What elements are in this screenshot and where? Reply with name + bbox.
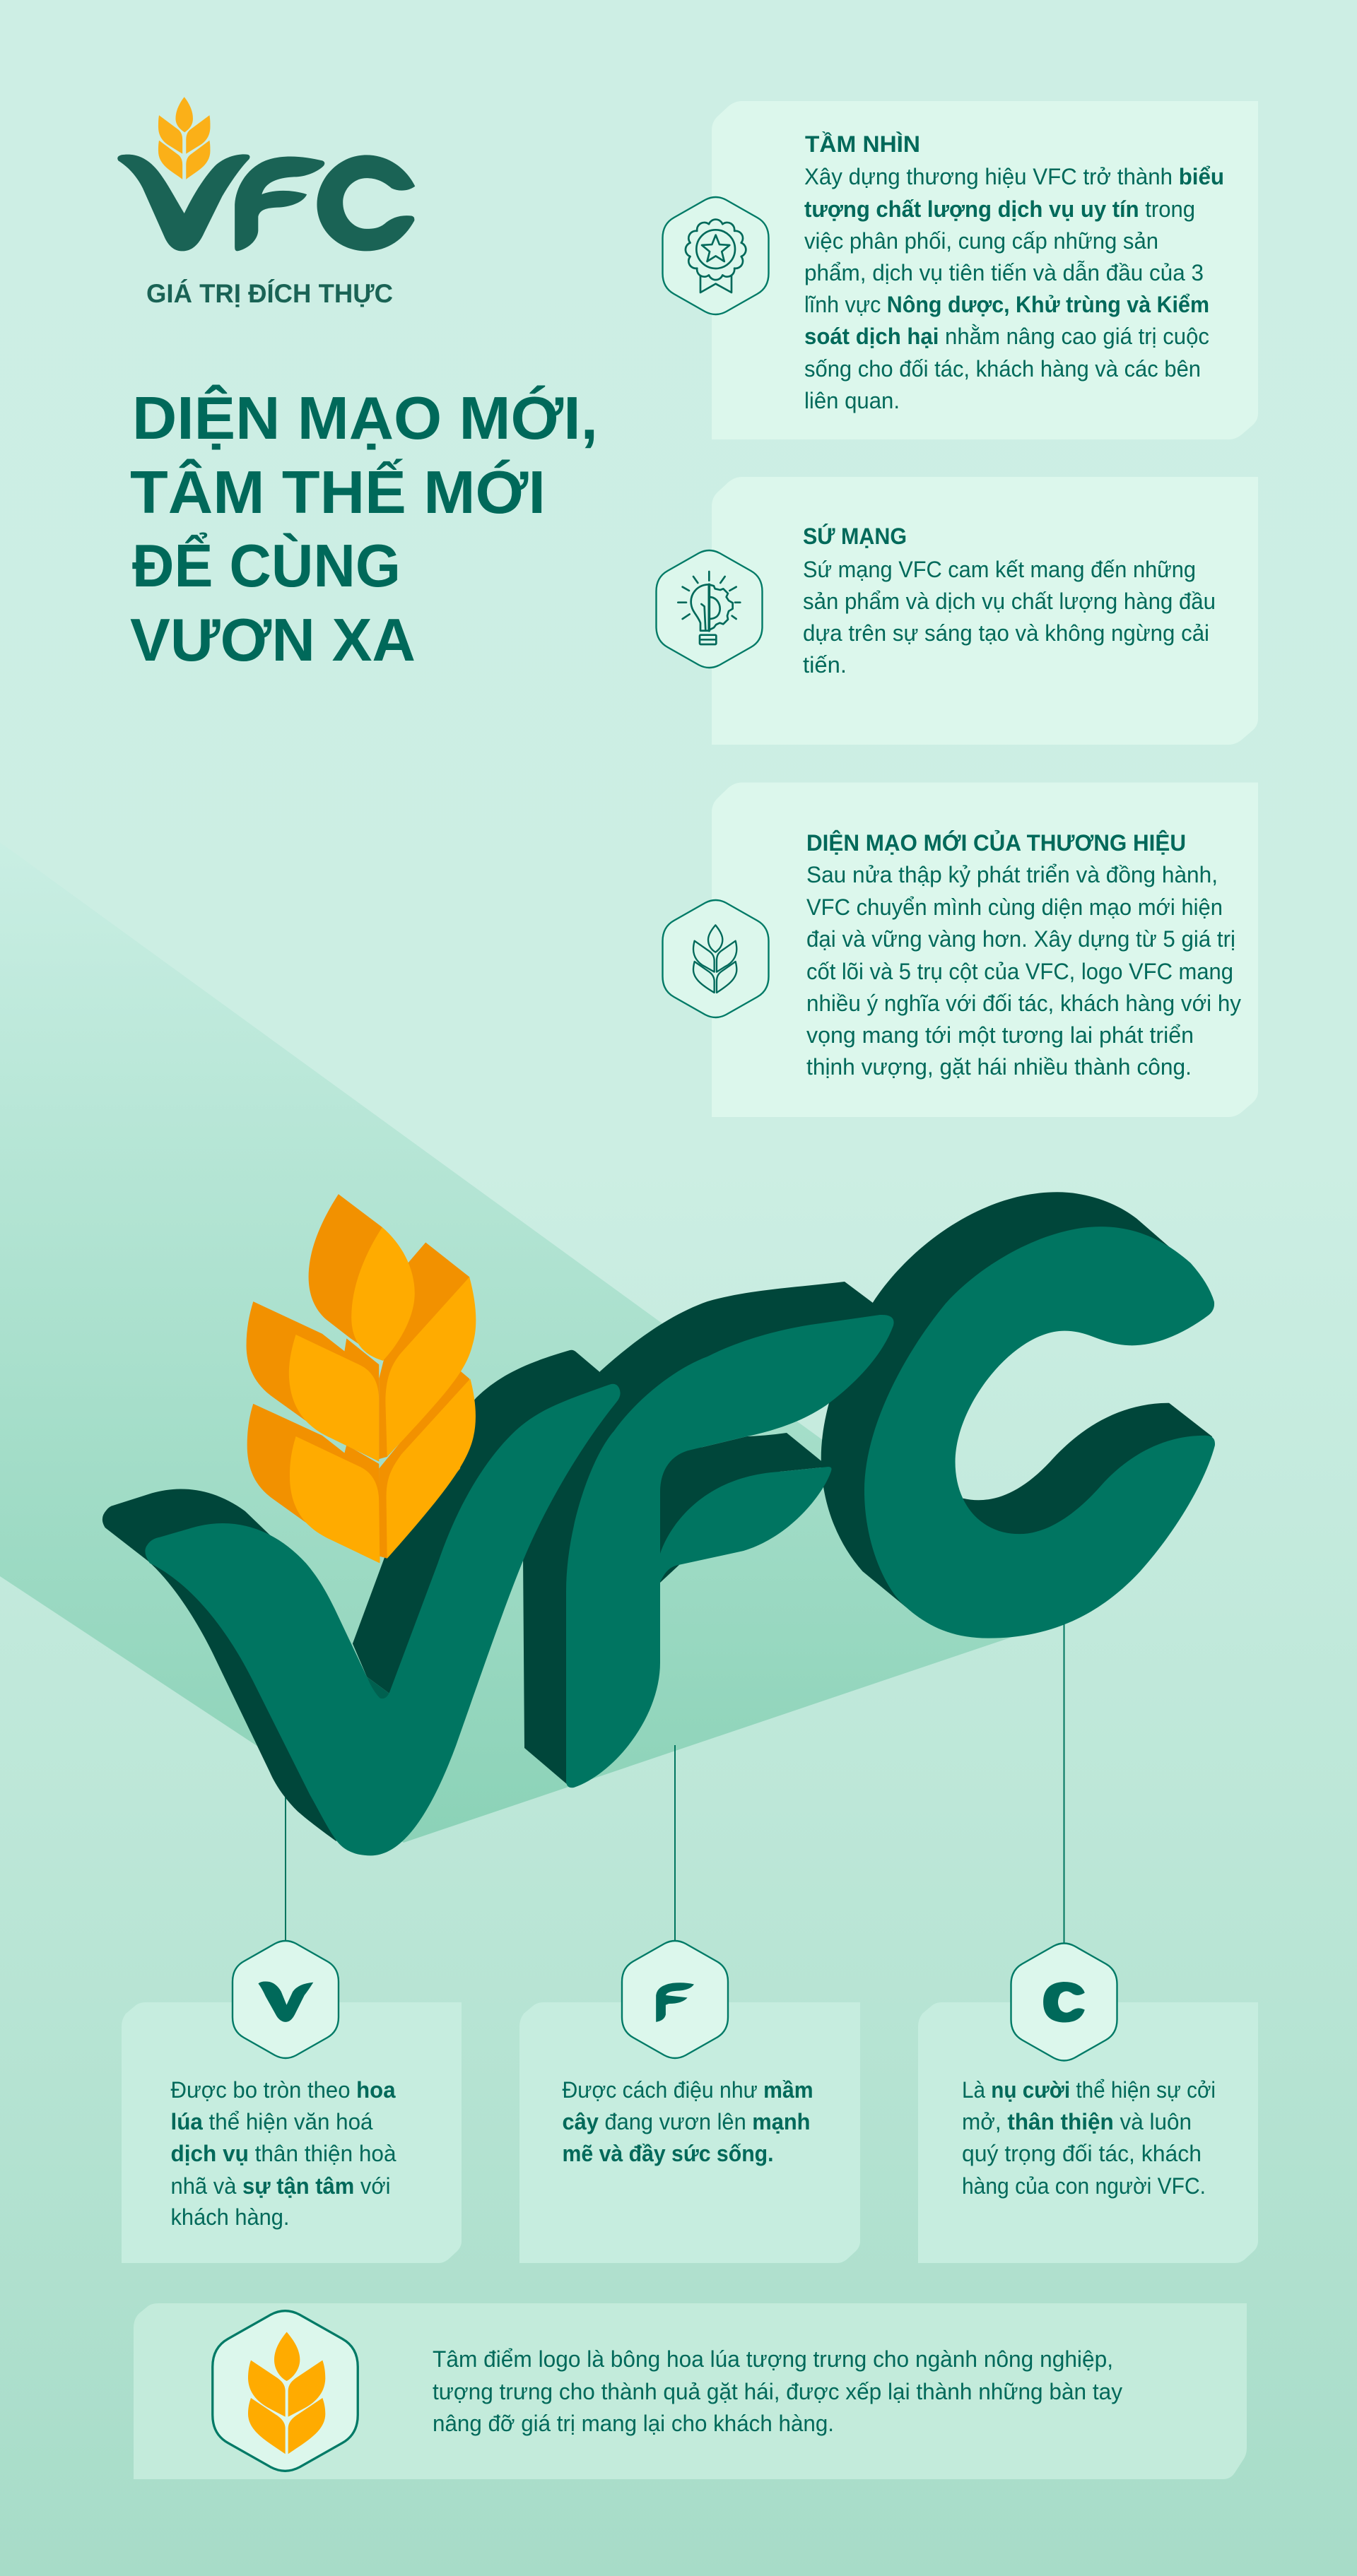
panel: sứ mạng: SỨ MẠNG [803,524,907,549]
title: VƯƠN XA [130,607,416,674]
panel: F: cây đang vươn lên mạnh [563,2109,810,2134]
panel: diện mạo mới của thương hiệu: thịnh vượng, gặt hái nhiều thành công. [806,1054,1192,1080]
icon: light bulb and gear [656,550,762,668]
panel: diện mạo mới của thương hiệu: cốt lõi và 5 trụ cột của VFC, logo VFC mang [806,959,1233,984]
panel: F: mẽ và đầy sức sống. [563,2141,773,2166]
panel: tầm nhìn: tượng chất lượng dịch vụ uy tín trong [804,196,1195,222]
title [130,384,598,674]
panel: V: khách hàng. [171,2204,290,2230]
title: TÂM THẾ MỚI [130,459,546,526]
panel: C: quý trọng đối tác, khách [962,2141,1202,2166]
tagline: GIÁ TRỊ ĐÍCH THỰC [146,279,393,308]
panel: logo meaning: nâng đỡ giá trị mang lại cho khách hàng. [433,2411,834,2436]
panel: tầm nhìn: soát dịch hại nhằm nâng cao giá trị cuộc [804,324,1209,349]
panel: tầm nhìn: việc phân phối, cung cấp những sản [804,228,1158,254]
panel: diện mạo mới của thương hiệu: vọng mang tới một tương lai phát triển [806,1022,1194,1048]
3D letter: V [102,1350,621,1855]
panel: tầm nhìn [712,101,1258,439]
icon: wheat outline [663,900,769,1017]
panel: tầm nhìn: liên quan. [804,388,900,413]
panel: C: mở, thân thiện và luôn [962,2109,1192,2134]
icon: F hexagon [622,1941,728,2058]
panel: tầm nhìn: TẦM NHÌN [805,131,920,157]
panel: V: nhã và sự tận tâm với [171,2173,390,2199]
icon: award medal [663,197,769,314]
icon: C hexagon [1011,1943,1117,2060]
title: ĐỂ CÙNG [132,532,401,600]
logo: VFC [117,97,415,251]
panel: logo meaning: tượng trưng cho thành quả gặt hái, được xếp lại thành những bàn tay [433,2379,1122,2404]
title: DIỆN MẠO MỚI, [132,384,598,452]
panel: sứ mạng [712,477,1258,745]
3D letter: C [821,1192,1215,1638]
panel: diện mạo mới của thương hiệu [712,783,1258,1117]
3D wheat [247,1194,476,1563]
panel: V: Được bo tròn theo hoa [171,2077,396,2103]
panel: C [918,2002,1258,2263]
icon: wheat hexagon [213,2311,358,2471]
panel: sứ mạng: sản phẩm và dịch vụ chất lượng hàng đầu [803,589,1216,614]
panel: tầm nhìn: Xây dựng thương hiệu VFC trở thành biểu [804,164,1224,189]
panel: sứ mạng: Sứ mạng VFC cam kết mang đến những [803,557,1196,582]
panel: V: lúa thể hiện văn hoá [171,2109,373,2134]
panel: diện mạo mới của thương hiệu: Sau nửa thập kỷ phát triển và đồng hành, [806,862,1218,887]
panel: C: hàng của con người VFC. [962,2173,1206,2199]
panel: tầm nhìn: lĩnh vực Nông dược, Khử trùng và Kiểm [804,292,1209,317]
panel: F [519,2002,860,2263]
panel: tầm nhìn: sống cho đối tác, khách hàng và các bên [804,356,1201,382]
panel: diện mạo mới của thương hiệu: DIỆN MẠO MỚI CỦA THƯƠNG HIỆU [806,830,1186,856]
panel: tầm nhìn: phẩm, dịch vụ tiên tiến và dẫn đầu của 3 [804,260,1204,285]
panel: sứ mạng: dựa trên sự sáng tạo và không ngừng cải [803,620,1209,646]
panel: F: Được cách điệu như mầm [563,2077,813,2103]
panel: diện mạo mới của thương hiệu: nhiều ý nghĩa với đối tác, khách hàng với hy [806,991,1241,1016]
icon: V hexagon [233,1941,339,2058]
connector: F [674,1745,676,1942]
panel: logo meaning [134,2303,1247,2479]
panel: V [122,2002,462,2263]
panel: diện mạo mới của thương hiệu: đại và vững vàng hơn. Xây dựng từ 5 giá trị [806,926,1235,952]
panel: logo meaning: Tâm điểm logo là bông hoa lúa tượng trưng cho ngành nông nghiệp, [433,2346,1113,2372]
connector: V [285,1788,286,1942]
panel: diện mạo mới của thương hiệu: VFC chuyển mình cùng diện mạo mới hiện [806,894,1223,920]
panel: V: dịch vụ thân thiện hoà [171,2141,396,2166]
3D letter: F [523,1282,894,1788]
panel: C: Là nụ cười thể hiện sự cởi [962,2077,1216,2103]
connector: C [1063,1614,1064,1944]
panel: sứ mạng: tiến. [803,652,847,678]
